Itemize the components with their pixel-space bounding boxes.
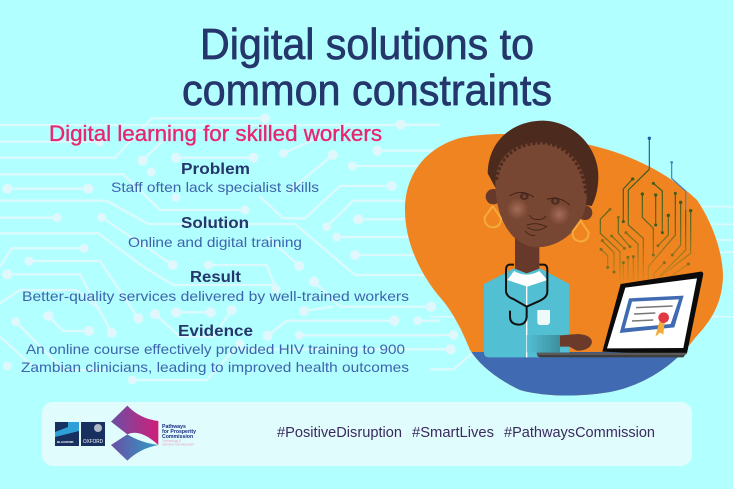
- logo: Pathways for Prosperity Commission: Inclusive Development: [162, 442, 194, 446]
- hashtags: #SmartLives: [412, 425, 494, 441]
- icon: laptop with certificate: [537, 272, 703, 357]
- text block: solution: [128, 215, 302, 250]
- icon: health worker: [484, 121, 598, 357]
- hashtags: #PathwaysCommission: [504, 425, 655, 441]
- stethoscope: [506, 265, 547, 325]
- circuit board background pattern: [0, 113, 733, 384]
- orange blob with blue desk: [400, 130, 733, 402]
- text block: evidence: [21, 323, 409, 375]
- text block: result: [22, 269, 409, 304]
- collar: [507, 271, 547, 287]
- logo: University of Oxford: [81, 422, 105, 446]
- logo: Pathways for Prosperity Commission: Pathways: [162, 424, 186, 430]
- logo: Pathways for Prosperity Commission: for Prosperity: [162, 429, 196, 435]
- eyes: [520, 193, 529, 200]
- footer panel: [42, 402, 692, 466]
- icon: circuit lines: [599, 137, 692, 283]
- text block: result: Better-quality services delivered by well-trained workers: [22, 288, 409, 304]
- neck: [515, 237, 539, 273]
- pocket: [537, 310, 550, 325]
- title: [182, 20, 552, 115]
- text block: solution: Online and digital training: [128, 234, 302, 250]
- text block: evidence: Evidence: [178, 323, 253, 340]
- sleeve: [527, 335, 560, 352]
- text block: problem: Problem: [181, 161, 250, 178]
- logo: Blavatnik School of Government: BLAVATNIK: [57, 440, 74, 444]
- earrings: [485, 206, 501, 227]
- logo: Pathways for Prosperity Commission: [111, 406, 196, 461]
- tunic: [484, 268, 569, 357]
- text block: evidence: An online course effectively provided HIV training to 900: [26, 341, 405, 357]
- subtitle: digital learning: Digital learning for skilled workers: [49, 121, 382, 146]
- text block: result: Result: [190, 269, 242, 286]
- hashtags: #PositiveDisruption: [277, 425, 402, 441]
- cheeks: [507, 198, 528, 220]
- ears: [486, 189, 501, 204]
- hair: [488, 121, 598, 206]
- hand: [560, 334, 592, 351]
- face: [495, 142, 587, 247]
- title: common constraints: [182, 66, 552, 115]
- text block: solution: Solution: [181, 215, 249, 232]
- logo: Blavatnik School of Government: [55, 422, 79, 446]
- text block: evidence: Zambian clinicians, leading to improved health outcomes: [21, 359, 409, 375]
- illustration: circuit and health worker with laptop: [484, 121, 703, 357]
- logo: Pathways for Prosperity Commission: Technology &: [162, 439, 182, 443]
- logo: Pathways for Prosperity Commission: Commission: [162, 434, 193, 440]
- certificate: [620, 296, 684, 333]
- hairline scallops: [497, 143, 586, 195]
- logo: University of Oxford: OXFORD: [83, 439, 103, 445]
- text block: problem: [111, 161, 319, 195]
- text block: problem: Staff often lack specialist skills: [111, 179, 319, 195]
- hashtags: [277, 425, 655, 441]
- title: Digital solutions to: [200, 20, 534, 69]
